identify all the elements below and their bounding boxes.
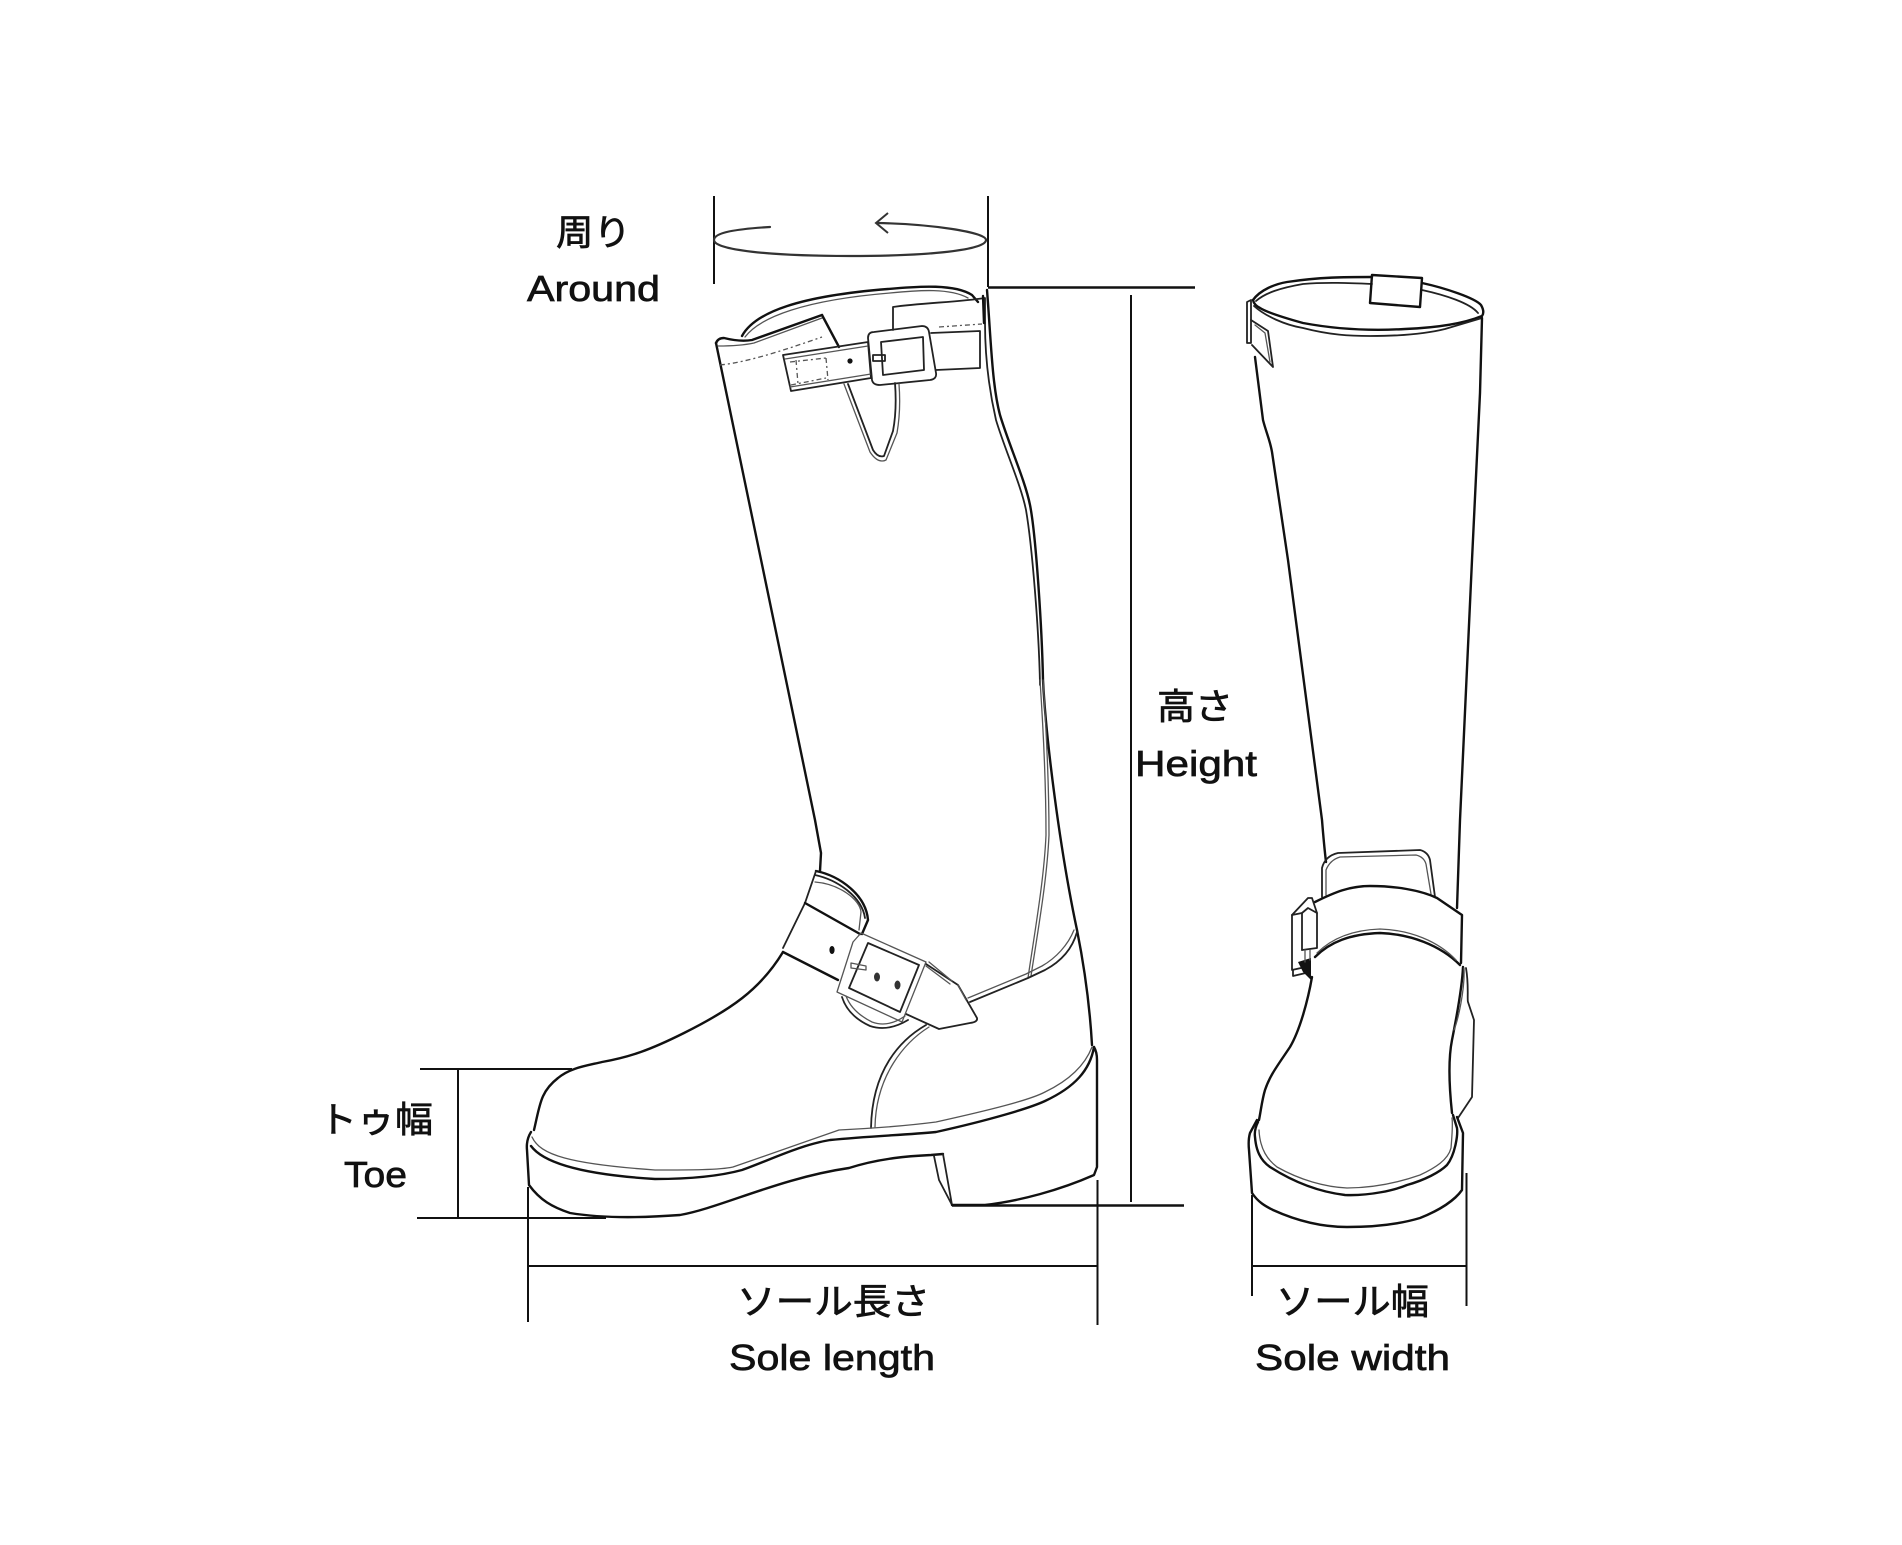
- back loop: [1322, 850, 1435, 897]
- boot collar opening: [716, 287, 985, 365]
- welt and sole: [1249, 1115, 1463, 1227]
- side view boot: [527, 287, 1097, 1217]
- label: sole width: ソール幅: [1276, 1281, 1429, 1322]
- label: sole length: ソール長さ: [737, 1281, 930, 1322]
- sole and heel: [527, 1047, 1097, 1217]
- label: height: Height: [1135, 743, 1257, 784]
- shaft top opening: [1247, 275, 1483, 367]
- label: around: [527, 212, 660, 309]
- dimension: sole length: [528, 1180, 1098, 1378]
- shaft outline: [1255, 318, 1482, 908]
- vamp: [1259, 967, 1474, 1120]
- boot shaft outline: [716, 290, 1092, 1045]
- label: sole length: Sole length: [729, 1337, 935, 1378]
- label: height: 高さ: [1157, 686, 1233, 727]
- label: sole length: [729, 1281, 935, 1378]
- ankle strap and buckle: [783, 871, 977, 1029]
- label: around: 周り: [556, 212, 631, 253]
- ankle strap: [1292, 886, 1462, 980]
- dimension: around: [527, 196, 988, 309]
- collar slit: [844, 383, 900, 461]
- welt: [531, 1047, 1094, 1179]
- label: height: [1135, 686, 1257, 784]
- front view boot: [1247, 275, 1483, 1227]
- label: sole width: [1255, 1281, 1450, 1378]
- label: toe: トゥ幅: [319, 1099, 433, 1140]
- label: toe: [319, 1099, 433, 1195]
- dimension: height: [952, 288, 1257, 1206]
- label: around: Around: [527, 268, 660, 309]
- top strap and buckle: [783, 326, 980, 391]
- vamp and heel counter: [534, 930, 1077, 1130]
- side buckle: [1292, 898, 1317, 980]
- dimension: sole width: [1252, 1173, 1467, 1378]
- label: toe: Toe: [344, 1154, 407, 1195]
- dimension: toe: [319, 1069, 606, 1218]
- label: sole width: Sole width: [1255, 1337, 1450, 1378]
